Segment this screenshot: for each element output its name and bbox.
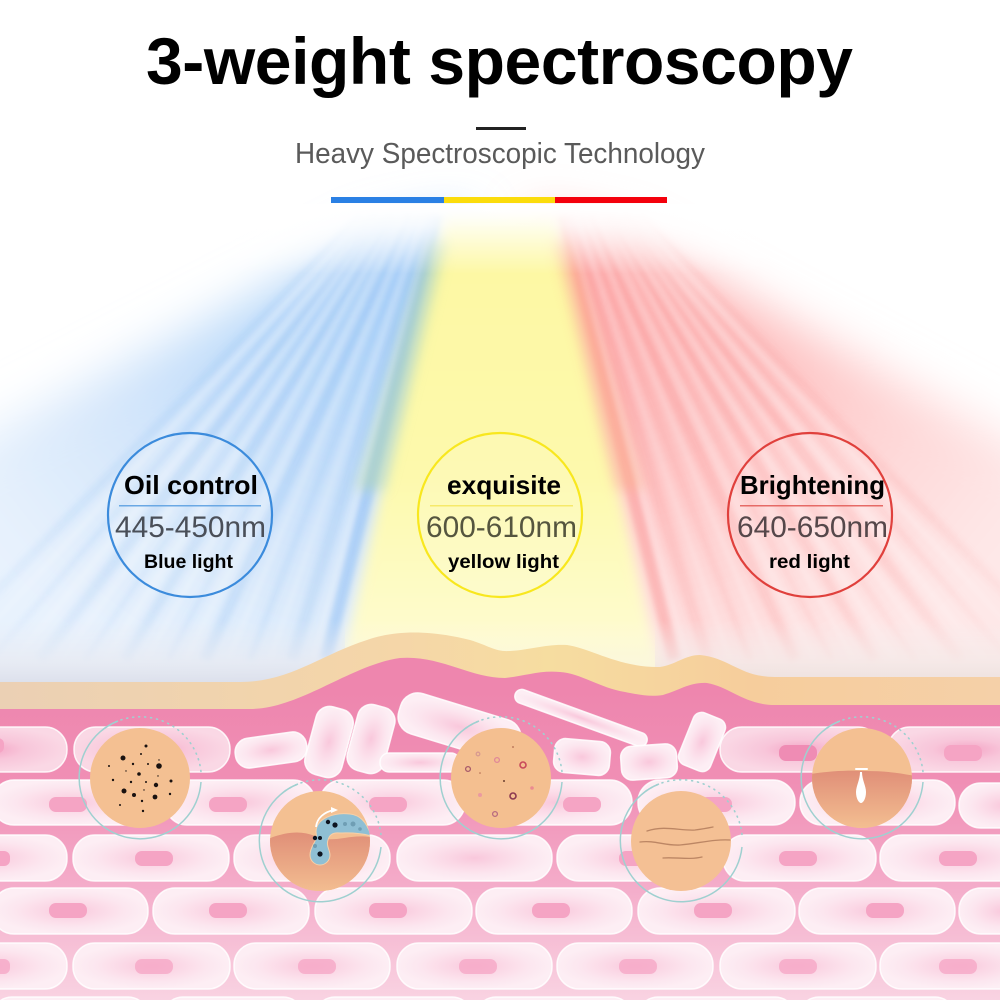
- beam bottom haze centre: [345, 620, 655, 690]
- cell row 2: [0, 780, 1000, 828]
- skin surface layer: [0, 632, 1000, 730]
- skin pink tissue layer: [0, 658, 1000, 1000]
- cell row 4: [0, 888, 1000, 934]
- badge: brightening: 640-650nm: [737, 511, 888, 544]
- badge: brightening: Brightening: [740, 470, 885, 500]
- beam bottom haze right: [655, 620, 1000, 690]
- loose surface cells: [233, 687, 728, 781]
- red light beam: [530, 215, 1000, 690]
- skin cells: [0, 687, 1000, 1000]
- colour bar: [331, 197, 667, 203]
- icon: wrinkles: [620, 780, 742, 902]
- icon: acne spots: [440, 717, 562, 839]
- badge: oil control: Blue light: [144, 552, 234, 573]
- yellow light beam: [338, 215, 662, 680]
- cell row 3: [0, 835, 1000, 881]
- icon: blackheads: [79, 717, 201, 839]
- icon: pore tightening: [801, 717, 923, 839]
- icon: clogged pore: [259, 780, 381, 902]
- cell row 1: [0, 727, 1000, 772]
- badge: oil control: Oil control: [124, 470, 258, 500]
- beam bottom haze left: [0, 620, 345, 690]
- badge: oil control: 445-450nm: [115, 511, 266, 544]
- subtitle: Heavy Spectroscopic Technology: [295, 138, 705, 170]
- badge: exquisite: 600-610nm: [426, 511, 577, 544]
- badge: exquisite: yellow light: [448, 552, 560, 573]
- blue light beam: [0, 215, 470, 690]
- badge: exquisite: [418, 433, 582, 597]
- light beams: [0, 204, 1000, 690]
- cell nuclei: [0, 738, 982, 974]
- badge: brightening: [728, 433, 892, 597]
- title dash: [476, 127, 526, 130]
- cell row 6: [0, 997, 955, 1000]
- cell row 5: [0, 943, 1000, 989]
- beam top fade: [0, 204, 1000, 274]
- badge: brightening: red light: [769, 552, 851, 573]
- title: 3-weight spectroscopy: [146, 24, 853, 98]
- badge: exquisite: exquisite: [447, 470, 561, 500]
- badge: oil control: [108, 433, 272, 597]
